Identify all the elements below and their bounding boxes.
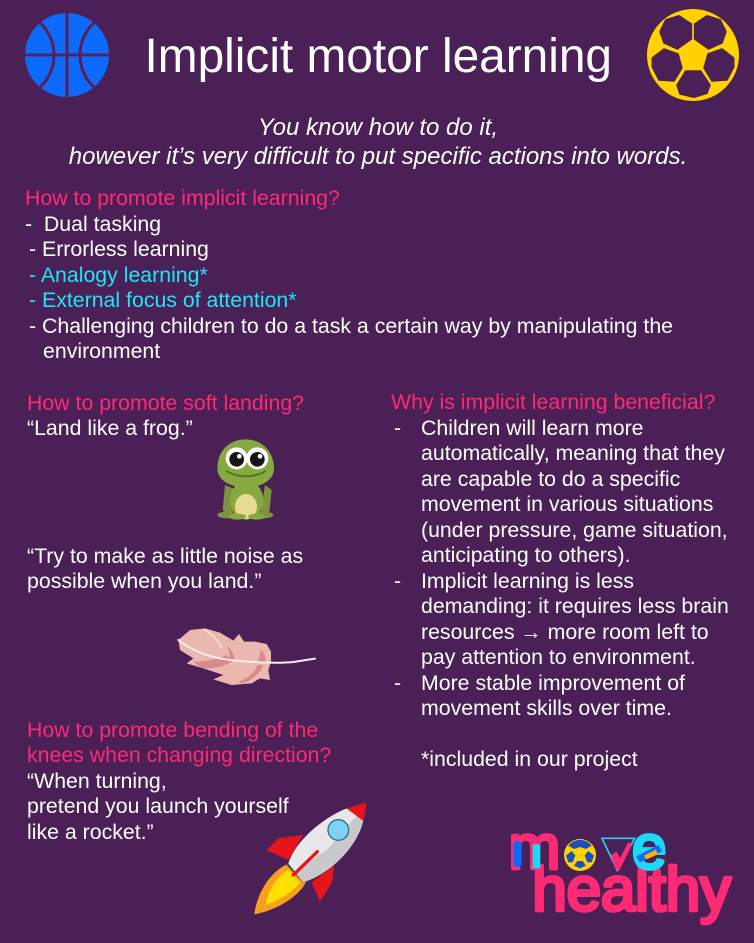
quote: rocket: pretend you launch yourself bbox=[27, 794, 289, 818]
heading: bending of the knees: How to promote bending of the bbox=[27, 718, 318, 742]
list item: challenging children bbox=[29, 314, 673, 363]
quote: frog: “Land like a frog.” bbox=[27, 416, 193, 440]
section: soft landing bbox=[27, 390, 304, 593]
benefit 1: Children will learn more bbox=[421, 416, 644, 440]
benefit 2: - bbox=[394, 568, 401, 592]
section: why implicit learning is beneficial bbox=[391, 390, 729, 771]
heading: why beneficial: Why is implicit learning beneficial? bbox=[391, 390, 715, 414]
quote: rocket: “When turning, bbox=[27, 768, 167, 792]
quote: noise: “Try to make as little noise as bbox=[27, 544, 303, 568]
list item: challenging children: environment bbox=[43, 339, 160, 363]
list item: analogy learning: - Analogy learning* bbox=[29, 262, 208, 286]
subtitle: however it’s very difficult to put specific actions into words. bbox=[69, 143, 687, 170]
benefit 2: Implicit learning is less bbox=[421, 568, 634, 592]
benefit 2: pay attention to environment. bbox=[421, 645, 696, 669]
benefit 3: - bbox=[394, 670, 401, 694]
benefit 3: movement skills over time. bbox=[421, 696, 672, 720]
benefit 1: anticipating to others). bbox=[421, 543, 631, 567]
logo word: move: e bbox=[632, 813, 666, 882]
logo word: move: m bbox=[509, 813, 560, 882]
logo word: healthy: healthy bbox=[532, 855, 731, 924]
quote: rocket: like a rocket.” bbox=[27, 820, 154, 844]
benefit 1: - bbox=[394, 416, 401, 440]
list item: dual tasking: - Dual tasking bbox=[25, 212, 161, 236]
heading: bending of the knees: knees when changing direction? bbox=[27, 743, 331, 767]
list item: external focus: - External focus of attention* bbox=[29, 288, 297, 312]
benefit 2: resources → more room left to bbox=[421, 620, 709, 644]
list item: challenging children: - Challenging children to do a task a certain way by manipulating the bbox=[29, 314, 673, 338]
subtitle: You know how to do it, bbox=[258, 114, 498, 141]
icon: rocket bbox=[254, 802, 367, 914]
title: Implicit motor learning bbox=[144, 30, 612, 83]
heading: soft landing: How to promote soft landing? bbox=[27, 390, 304, 414]
list item: errorless learning: - Errorless learning bbox=[29, 236, 209, 260]
icon: basketball bbox=[25, 13, 109, 97]
heading: bending of the knees bbox=[27, 718, 331, 767]
logo word: move bbox=[509, 813, 666, 882]
section: how to promote implicit learning bbox=[25, 186, 673, 363]
quote: noise: possible when you land.” bbox=[27, 569, 261, 593]
quote: rocket bbox=[27, 768, 289, 844]
benefit 1: (under pressure, game situation, bbox=[421, 518, 728, 542]
icon: soccer ball bbox=[647, 9, 739, 101]
icon: feather bbox=[177, 628, 316, 685]
benefit 2 bbox=[394, 568, 729, 669]
benefit 1: automatically, meaning that they bbox=[421, 441, 725, 465]
subtitle bbox=[69, 114, 687, 170]
heading: implicit learning: How to promote implicit learning? bbox=[25, 186, 340, 210]
benefit 2: demanding: it requires less brain bbox=[421, 594, 729, 618]
section: bending the knees bbox=[27, 718, 331, 844]
benefit 1: movement in various situations bbox=[421, 492, 713, 516]
logo: move healthy bbox=[509, 813, 733, 926]
icon: frog bbox=[217, 439, 274, 520]
benefit 3 bbox=[394, 670, 685, 720]
benefit 1 bbox=[394, 416, 728, 567]
quote: noise bbox=[27, 544, 303, 593]
benefit 3: More stable improvement of bbox=[421, 670, 685, 694]
benefit 1: are capable to do a specific bbox=[421, 466, 680, 490]
footnote: *included in our project bbox=[421, 747, 638, 771]
